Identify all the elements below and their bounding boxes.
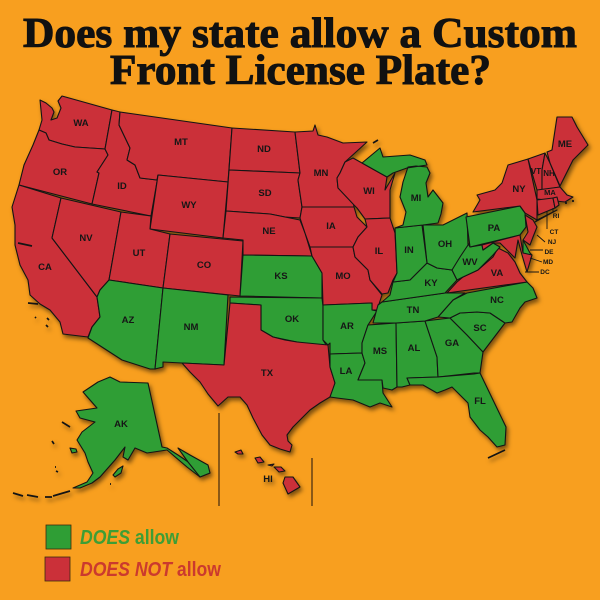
state: CT [537,198,555,215]
state: NH: NH [543,169,555,178]
state: FL: FL [474,396,486,407]
state: SD: SD [258,188,272,199]
state: UT: UT [133,248,146,259]
small-state labels: NJ [548,239,557,246]
state: MO [310,247,382,310]
state: WY: WY [181,200,197,211]
small-state labels [540,213,559,276]
state: NH [542,153,560,190]
state: ID: ID [117,181,127,192]
legend text: does allow: DOES allow [80,527,179,549]
state: OH: OH [438,239,452,250]
state: OK: OK [285,314,299,325]
state: ID [92,110,158,216]
Alaska panhandle islands [178,448,210,477]
state: DE [523,240,532,255]
state: NM [155,288,228,369]
state: SC: SC [473,323,487,334]
state: WV [452,243,500,280]
state: NV [52,198,121,297]
state: IA: IA [326,221,336,232]
state: IL: IL [375,246,383,257]
state: CO: CO [197,260,211,271]
state: MN [295,125,367,207]
state: AK [73,377,210,488]
state: NY [473,159,557,222]
state: SD [226,170,302,218]
state: WA [39,96,112,149]
state: HI: HI [263,474,273,485]
state: IA [300,207,367,247]
state: HI [235,450,300,494]
state: IL [353,218,397,294]
state: IN [393,225,427,282]
divider: Alaska and Hawaii [219,413,312,506]
state: AZ [88,280,163,369]
state: ME [547,117,588,186]
title: Does my state allow a Custom [23,11,577,57]
small-state labels: DE [544,249,554,256]
state: MN: MN [314,168,329,179]
state: MS: MS [373,346,387,357]
state: WI: WI [363,186,375,197]
state: TN: TN [407,305,419,316]
state: TX: TX [261,368,274,379]
state: MS [358,323,397,390]
state: AK: AK [114,419,128,430]
state: KY: KY [424,278,438,289]
legend swatch: does allow [46,525,71,549]
state: LA [330,353,392,407]
state: RI [553,197,559,208]
state: CO [163,234,243,296]
state: OR [19,130,108,204]
state: PA: PA [488,223,500,234]
Aleutian and Bering islands [13,140,574,497]
state: WA: WA [73,118,89,129]
state: CA: CA [38,262,52,273]
Alaska islands: Nunivak and Kodiak [70,448,123,477]
state: NC: NC [490,295,504,306]
state: WI [337,158,395,219]
small-state labels: CT [550,229,558,236]
state: ME: ME [558,139,572,150]
state: CA [12,185,100,337]
state: AL: AL [408,343,421,354]
state: GA [425,318,483,377]
small-state labels: MD [543,259,553,266]
state: PA [466,206,526,247]
state: OR: OR [53,167,67,178]
state: AR [323,303,377,354]
state: NV: NV [79,233,93,244]
state: MT [119,112,232,182]
state: NC [438,282,537,323]
state: LA: LA [340,366,352,377]
state: KS: KS [274,271,288,282]
state: KS [240,255,322,298]
title [23,11,577,94]
state: ND [229,128,300,173]
legend [45,525,221,581]
state: OK [230,297,328,348]
state: NM: NM [184,322,198,333]
state: TX [182,303,335,452]
state: NJ [523,215,537,245]
state: WV: WV [462,257,478,268]
state: VA [447,248,527,293]
state: ND: ND [257,144,271,155]
state: WY [150,175,228,238]
state: UT [109,212,170,288]
state: MI [362,148,443,228]
state: TN [373,293,465,323]
state: NE [223,211,312,256]
state: MI: MI [411,193,421,204]
state: NE: NE [262,226,276,237]
state: MA: MA [544,188,556,197]
state: IN: IN [404,245,414,256]
state: VT [528,153,545,190]
small-state leader lines [525,208,553,272]
state: OH [423,213,468,270]
small-state labels: DC [540,269,550,276]
state: AL [396,321,438,387]
state: MA [537,187,573,202]
state: KY [382,263,457,302]
small-state labels: RI [553,213,559,220]
legend swatch: does not allow [45,557,70,581]
state: VA: VA [491,268,503,279]
state: GA: GA [445,338,459,349]
legend text: does not allow: DOES NOT allow [80,559,221,581]
map of the United States [12,96,588,497]
state: SC [450,312,505,352]
title: Front License Plate? [110,48,491,94]
state: FL [407,373,506,447]
state: NY: NY [512,184,526,195]
state: VT: VT [531,167,541,176]
state: MT: MT [174,137,188,148]
state: MD [482,235,532,272]
state: AZ: AZ [122,315,135,326]
state: MO: MO [335,271,351,282]
state: AR: AR [340,321,354,332]
